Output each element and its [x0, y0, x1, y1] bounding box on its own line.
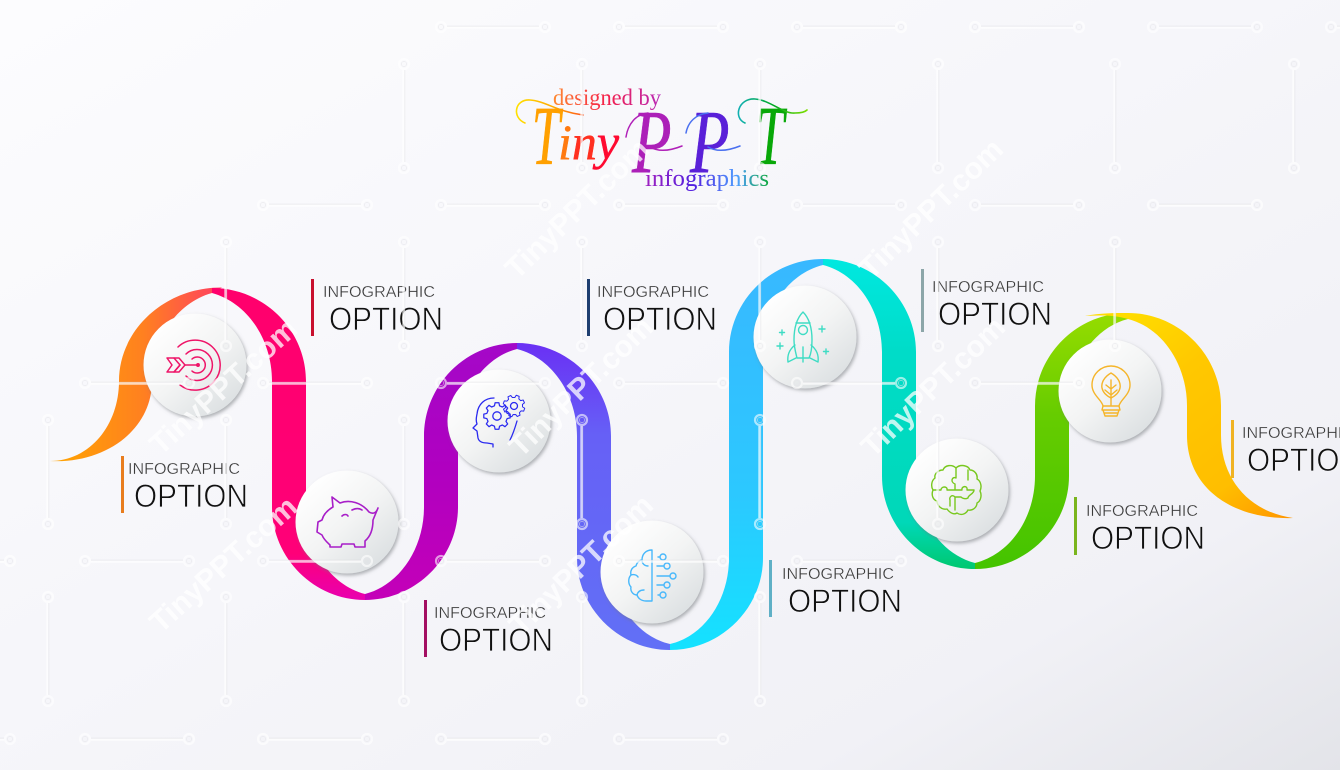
label 2: red	[311, 279, 443, 337]
label 2: red: INFOGRAPHIC	[323, 284, 435, 301]
label 1: orange: OPTION	[134, 478, 248, 514]
label 1: orange	[121, 456, 248, 514]
watermarks	[143, 133, 1012, 642]
ribbon segment: purple	[365, 343, 517, 600]
logo line: infographics: infographics	[645, 166, 769, 192]
ribbon segment: violet	[517, 343, 670, 650]
label 7: green: INFOGRAPHIC	[1086, 503, 1198, 520]
node 5: rocket icon	[754, 286, 856, 388]
logo swashes	[516, 99, 807, 150]
ribbon segment: blue	[670, 259, 823, 650]
label 6: grey teal: INFOGRAPHIC	[932, 279, 1044, 296]
label 5: light blue: INFOGRAPHIC	[782, 566, 894, 583]
label 8: yellow	[1231, 420, 1340, 478]
icon: head with gears	[473, 392, 528, 447]
icon: puzzle brain	[932, 466, 981, 514]
label 4: navy: OPTION	[603, 301, 717, 337]
label 3: magenta: OPTION	[439, 622, 553, 658]
label 7: green: OPTION	[1091, 520, 1205, 556]
ribbon segment: orange tail	[50, 287, 222, 461]
label 5: light blue	[769, 560, 902, 619]
watermarks: TinyPPT.com	[503, 489, 660, 642]
ribbon: winding path	[50, 259, 1293, 650]
logo line: designed by: designed by	[553, 85, 661, 110]
ribbon segment: yellow	[1085, 313, 1293, 518]
label 5: light blue: OPTION	[788, 583, 902, 619]
label 7: green	[1074, 497, 1205, 556]
label 3: magenta: INFOGRAPHIC	[434, 605, 546, 622]
node 7: light bulb icon	[1058, 340, 1162, 442]
label 4: navy	[587, 279, 717, 337]
ribbon segment: green	[975, 313, 1128, 569]
logo word: PPT: T	[756, 89, 787, 182]
watermarks: TinyPPT.com	[503, 311, 660, 464]
icon: piggy bank	[317, 497, 378, 547]
ribbon segment: teal	[823, 259, 975, 569]
label 6: grey teal	[921, 269, 1052, 332]
icon: target with arrow	[167, 340, 220, 390]
label 3: magenta	[424, 600, 553, 658]
logo: designed by TinyPPT infographics	[516, 85, 807, 192]
ribbon segment: pink	[212, 288, 365, 600]
logo word: PPT: P	[689, 92, 730, 192]
watermarks: TinyPPT.com	[499, 133, 656, 286]
watermarks: TinyPPT.com	[143, 312, 304, 461]
label 4: navy: INFOGRAPHIC	[597, 284, 709, 301]
logo word: PPT	[631, 89, 787, 192]
label 6: grey teal: OPTION	[938, 296, 1052, 332]
node 4: digital brain icon	[600, 520, 704, 624]
watermarks: TinyPPT.com	[853, 133, 1010, 286]
logo word: Tiny: T	[532, 89, 563, 182]
watermarks: TinyPPT.com	[143, 490, 304, 639]
logo word: Tiny: iny	[558, 114, 620, 170]
logo word: PPT: P	[631, 92, 672, 192]
node 2: piggy bank icon	[296, 470, 398, 574]
node 3: head with gears icon	[448, 370, 550, 472]
icon: light bulb with leaf	[1092, 366, 1130, 416]
watermarks: TinyPPT.com	[855, 311, 1012, 464]
logo word: Tiny	[532, 89, 620, 182]
node 1: target icon	[144, 314, 246, 416]
node 6: puzzle brain icon	[906, 438, 1008, 542]
icon: half brain with circuits	[629, 550, 676, 601]
label 2: red: OPTION	[329, 301, 443, 337]
label 1: orange: INFOGRAPHIC	[128, 461, 240, 478]
icon: rocket with stars	[777, 312, 828, 362]
